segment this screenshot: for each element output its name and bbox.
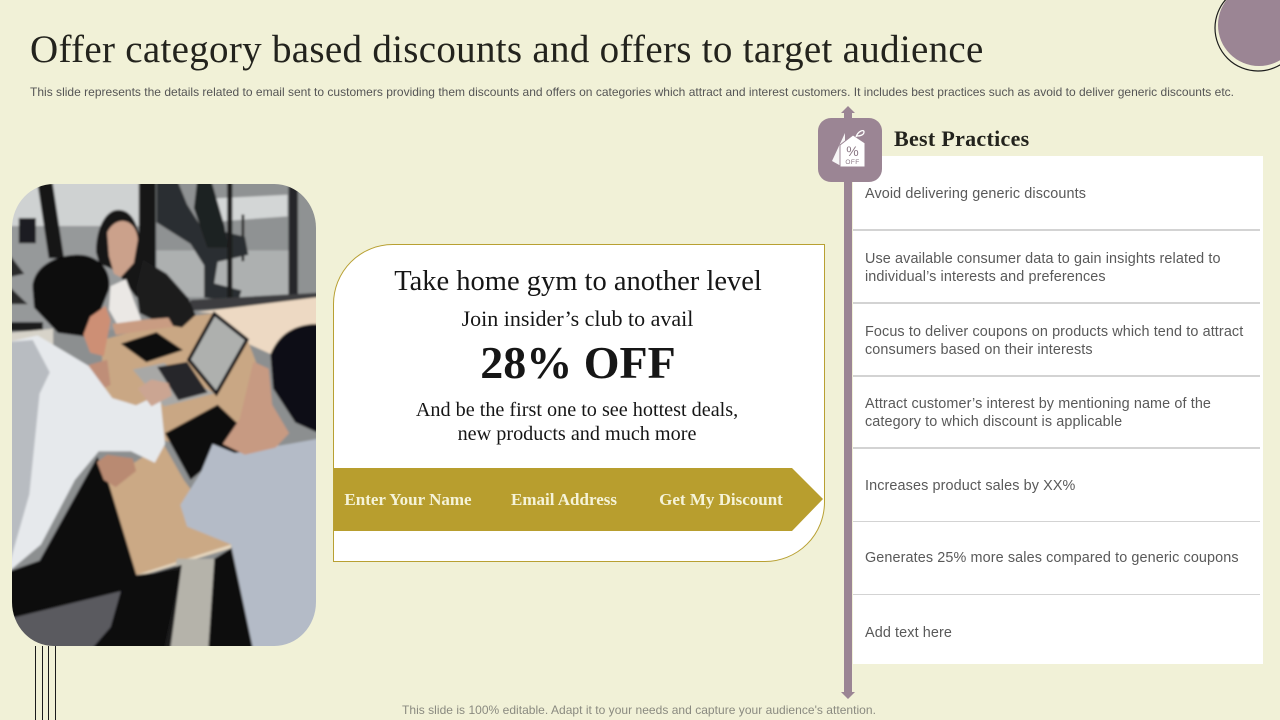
panel: best practices list: [853, 156, 1263, 664]
practice 3: Focus to deliver coupons on products which tend to attract: [865, 324, 1243, 340]
vertical double arrow: [841, 106, 855, 699]
practice 2: Use available consumer data to gain insights related to: [865, 251, 1221, 267]
practice 6: [853, 522, 1260, 595]
practice 6: Generates 25% more sales compared to generic coupons: [865, 550, 1239, 566]
icon: discount tag badge: %: [846, 143, 859, 159]
offer heading: Take home gym to another level: [394, 266, 762, 297]
practice 4: [853, 377, 1260, 449]
practice 2: individual’s interests and preferences: [865, 269, 1106, 285]
field label: name: Enter Your Name: [344, 490, 472, 509]
panel: offer card: [333, 244, 825, 562]
button label: discount: Get My Discount: [659, 490, 783, 509]
practice 2: [853, 231, 1260, 304]
practice 5: [853, 449, 1260, 522]
title: Offer category based discounts and offers to target audience: [30, 28, 984, 71]
offer description: And be the first one to see hottest deals,: [416, 399, 738, 421]
call to action arrow bar: [334, 468, 823, 531]
practice 3: [853, 304, 1260, 377]
photo: team meeting at a table: [12, 184, 316, 646]
subtitle description: This slide represents the details related to email sent to customers providing them discounts and offers on categories which attract and interest customers. It includes best practices such as avoid to deliver generic discounts etc.: [30, 85, 1234, 99]
best practices heading: Best Practices: [894, 126, 1030, 151]
practice 1: Avoid delivering generic discounts: [865, 186, 1086, 202]
footer note: This slide is 100% editable. Adapt it to your needs and capture your audience's attention.: [402, 703, 876, 717]
practice 5: Increases product sales by XX%: [865, 478, 1075, 494]
offer sub-heading: Join insider’s club to avail: [462, 306, 693, 331]
offer description: [416, 399, 738, 444]
icon: discount tag badge: [818, 118, 882, 182]
practice 7: Add text here: [865, 625, 952, 641]
decorative vertical lines: [35, 646, 56, 720]
decorative corner circle: [1214, 0, 1280, 72]
icon: discount tag badge: OFF: [845, 159, 860, 166]
discount value: 28% OFF: [480, 337, 676, 388]
field label: email: Email Address: [511, 490, 617, 509]
practice 3: consumers based on their interests: [865, 342, 1093, 358]
practice 1: [853, 156, 1260, 231]
practice 4: Attract customer’s interest by mentioning name of the: [865, 396, 1211, 412]
practice 4: category to which discount is applicable: [865, 414, 1122, 430]
offer description: new products and much more: [458, 422, 696, 444]
